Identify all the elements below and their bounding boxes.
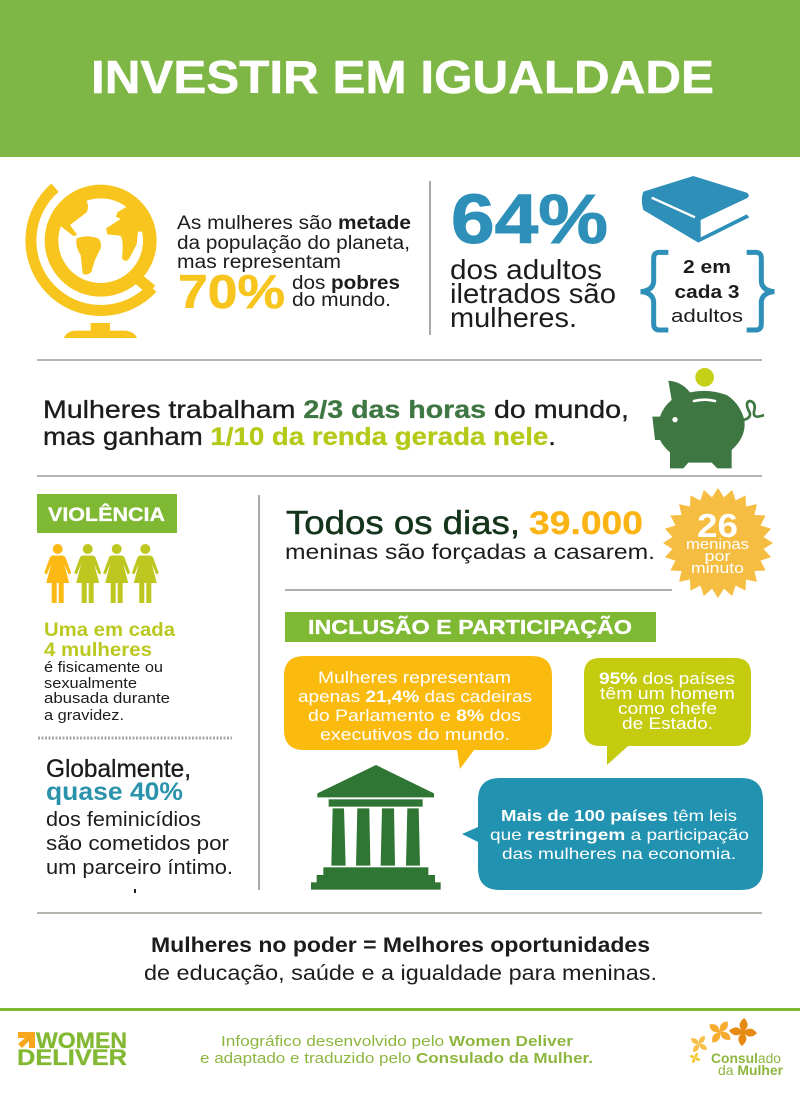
braces with 2 em cada 3: 2 em: [683, 257, 731, 277]
credits text: e adaptado e traduzido pelo Consulado da Mulher.: [200, 1050, 593, 1067]
text: one in four women: sexualmente: [44, 675, 137, 692]
text: one in four women: a gravidez.: [44, 707, 124, 724]
callout: parliament: do Parlamento e 8% dos: [308, 706, 521, 725]
text: one in four women: Uma em cada: [44, 620, 175, 641]
braces with 2 em cada 3: cada 3: [674, 282, 740, 302]
callout: restrictive laws: Mais de 100 países têm leis: [501, 808, 737, 825]
poverty text: dos pobres: [292, 273, 400, 294]
badge: 26 girls per minute: minuto: [691, 560, 744, 577]
icon: globe: [31, 185, 157, 338]
braces with 2 em cada 3: [641, 252, 774, 330]
icon: piggy bank: [652, 368, 764, 468]
panel: poverty: [31, 185, 411, 338]
stat: 70%: 70%: [178, 265, 285, 318]
text: every day: 39.000: [529, 505, 643, 541]
heading: inclusão e participação: INCLUSÃO E PARTICIPAÇÃO: [308, 616, 632, 639]
panel: work and income: [43, 368, 764, 468]
badge: 26 girls per minute: [663, 488, 773, 598]
callout: heads of state: [584, 658, 751, 765]
header band with title: [0, 0, 800, 157]
credits text: [200, 1033, 593, 1067]
callout: parliament: apenas 21,4% das cadeiras: [298, 687, 532, 706]
wordmark: Consulado: [711, 1051, 781, 1066]
work text: [43, 396, 629, 451]
vertical divider: [429, 181, 431, 335]
work text: mas ganham 1/10 da renda gerada nele .: [43, 423, 556, 451]
poverty text: [177, 213, 411, 311]
stat: 64%: 64%: [451, 180, 608, 258]
icon: tiny flower: [687, 1050, 703, 1066]
literacy text: iletrados são: [450, 278, 616, 309]
logo: Women Deliver: WOMEN: [36, 1028, 127, 1053]
icon: four women: [44, 544, 159, 603]
icon: highlighted woman: [44, 544, 71, 603]
icon: medium flower: [702, 1014, 738, 1050]
conclusion text: [144, 934, 657, 985]
poverty text: da população do planeta,: [177, 233, 410, 254]
text: every day: meninas são forçadas a casarem.: [285, 541, 655, 564]
icon: large flower: [728, 1017, 758, 1047]
icon: government building: [311, 765, 441, 890]
poverty text: do mundo.: [292, 290, 391, 311]
divider: [37, 912, 762, 914]
literacy text: dos adultos: [450, 254, 602, 285]
credits text: Infográfico desenvolvido pelo Women Deliver: [221, 1033, 573, 1050]
text: one in four women: abusada durante: [44, 690, 170, 707]
text: every day: [285, 504, 655, 564]
divider: [37, 359, 762, 361]
callout: heads of state: têm um homem: [600, 684, 735, 703]
logo: Women Deliver: DELIVER: [17, 1045, 127, 1070]
callout: heads of state: 95% dos países: [599, 669, 735, 688]
text: femicide: Globalmente,: [46, 755, 191, 783]
icon: woman 2: [74, 544, 101, 603]
panel: violence: [37, 494, 233, 893]
icon: woman 3: [103, 544, 130, 603]
callout: restrictive laws: [462, 778, 763, 890]
text: femicide: são cometidos por: [46, 833, 229, 855]
poverty text: mas representam: [177, 252, 341, 273]
heading: inclusão e participação: [285, 612, 656, 642]
callout: restrictive laws: que restringem a participação: [490, 827, 749, 844]
text: femicide: [46, 755, 233, 879]
poverty text: As mulheres são metade: [177, 213, 411, 234]
badge: 26 girls per minute: 26: [697, 507, 738, 544]
literacy text: [450, 254, 616, 333]
heading: violência: [37, 494, 177, 533]
panel: inclusion and participation: [284, 612, 763, 890]
panel: literacy: [450, 176, 774, 333]
text: every day: Todos os dias,: [286, 504, 520, 541]
callout: heads of state: como chefe: [618, 699, 717, 718]
heading: violência: VIOLÊNCIA: [48, 502, 165, 526]
text: one in four women: 4 mulheres: [44, 640, 152, 661]
title: INVESTIR EM IGUALDADE: [91, 51, 714, 103]
icon: woman 4: [132, 544, 159, 603]
text: one in four women: [44, 620, 175, 724]
logo: Consulado da Mulher: [685, 1014, 784, 1078]
wordmark: da Mulher: [718, 1063, 784, 1078]
callout: restrictive laws: das mulheres na economia.: [502, 846, 736, 863]
badge: 26 girls per minute: por: [704, 548, 730, 565]
work text: Mulheres trabalham 2/3 das horas do mundo,: [43, 396, 629, 424]
logo: Women Deliver: [17, 1028, 127, 1070]
conclusion text: Mulheres no poder = Melhores oportunidades: [151, 934, 650, 957]
callout: parliament: executivos do mundo.: [320, 725, 510, 744]
callout: heads of state: de Estado.: [622, 714, 713, 733]
icon: book: [642, 176, 749, 243]
icon: small flower: [685, 1030, 713, 1058]
text: femicide: dos feminicídios: [46, 809, 201, 831]
callout: parliament: Mulheres representam: [318, 668, 511, 687]
callout: parliament: [284, 656, 552, 769]
text: femicide: quase 40%: [46, 778, 183, 806]
divider: [37, 475, 762, 477]
badge: 26 girls per minute: meninas: [686, 536, 749, 553]
footer rule: [0, 1008, 800, 1011]
panel: child marriage: [285, 488, 773, 598]
text: one in four women: é fisicamente ou: [44, 659, 163, 676]
literacy text: mulheres.: [450, 302, 577, 333]
vertical divider: [258, 495, 260, 890]
braces with 2 em cada 3: adultos: [671, 306, 743, 326]
text: femicide: um parceiro íntimo.: [46, 857, 233, 879]
conclusion text: de educação, saúde e a igualdade para meninas.: [144, 962, 657, 985]
wordmark: [711, 1051, 784, 1078]
